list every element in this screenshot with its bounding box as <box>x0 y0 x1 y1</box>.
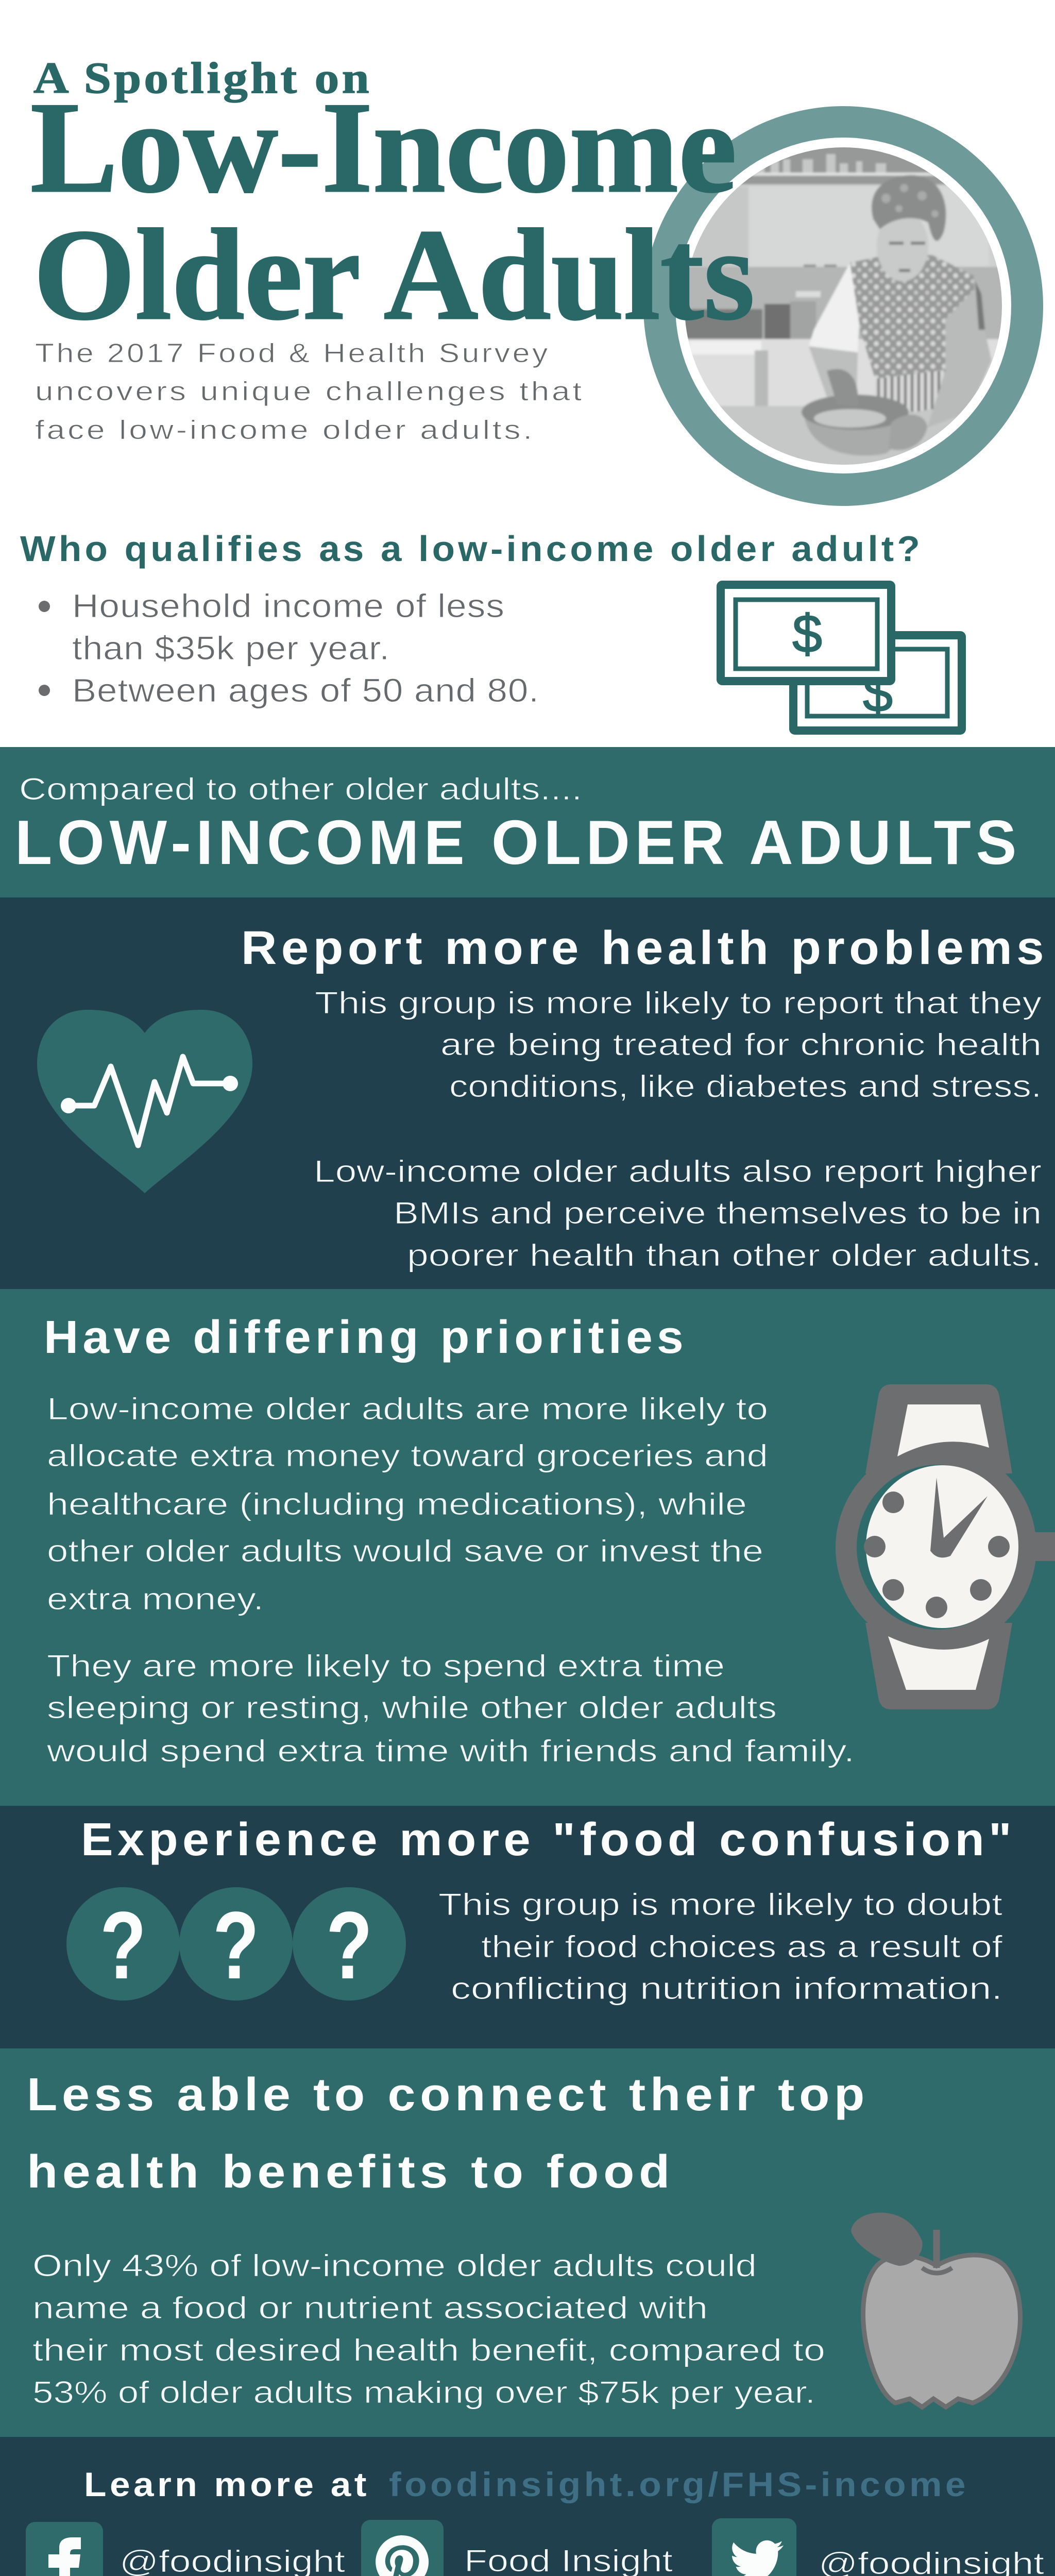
icon: three question marks: ? <box>100 1892 146 1999</box>
body text: Low-income older adults also report higher <box>314 1154 1042 1189</box>
body text: other older adults would save or invest the <box>47 1534 763 1568</box>
mixing bowl <box>805 418 891 456</box>
body text: are being treated for chronic health <box>440 1027 1042 1062</box>
body text: allocate extra money toward groceries and <box>47 1438 768 1473</box>
icon: money bills <box>721 585 962 731</box>
woman's apron <box>850 255 975 381</box>
icon: money bills: $ <box>792 604 822 664</box>
woman's sleeve and arm <box>809 263 861 352</box>
body text: Low-income older adults are more likely to <box>47 1392 768 1426</box>
body text: This group is more likely to doubt <box>438 1887 1002 1922</box>
heading: who qualifies: Who qualifies as a low-income older adult? <box>20 529 923 569</box>
heading: Experience more "food confusion" <box>81 1814 1016 1866</box>
body text: BMIs and perceive themselves to be in <box>394 1196 1042 1230</box>
body text: 53% of older adults making over $75k per year. <box>32 2375 815 2410</box>
panel: differing priorities <box>0 1289 1055 1806</box>
body text: their most desired health benefit, compared to <box>32 2333 825 2367</box>
heading: Have differing priorities <box>44 1312 688 1363</box>
icon: money bills: $ <box>863 664 893 723</box>
body text: healthcare (including medications), while <box>47 1487 747 1521</box>
intro text: The 2017 Food & Health Survey <box>35 338 550 368</box>
body text: sleeping or resting, while other older adults <box>47 1690 777 1725</box>
heading: Less able to connect their top <box>27 2069 869 2121</box>
qualification bullets <box>39 587 539 709</box>
body text: name a food or nutrient associated with <box>32 2291 708 2325</box>
icon: twitter <box>712 2518 796 2576</box>
title kicker: A Spotlight on <box>33 53 372 103</box>
panel: compared band <box>0 747 1055 897</box>
body text: Only 43% of low-income older adults could <box>32 2248 757 2283</box>
icon: heart with pulse <box>37 1010 252 1193</box>
photo: woman cooking in kitchen <box>680 144 1010 473</box>
panel: health problems <box>0 897 1055 1289</box>
qualification bullets: Household income of less <box>72 587 505 624</box>
intro text <box>35 338 584 445</box>
qualification bullets: than $35k per year. <box>72 630 390 667</box>
title line: Older Adults: Older Adults <box>33 202 755 347</box>
band heading: LOW-INCOME OLDER ADULTS <box>15 807 1022 877</box>
heading <box>27 2069 869 2198</box>
icon: wristwatch <box>836 1384 1055 1709</box>
body text: They are more likely to spend extra time <box>47 1649 725 1683</box>
panel: health benefits to food <box>0 2048 1055 2437</box>
title <box>30 53 755 347</box>
body text: poorer health than other older adults. <box>407 1238 1042 1273</box>
panel: food confusion <box>0 1806 1055 2048</box>
icon: three question marks: ? <box>326 1892 372 1999</box>
body text <box>46 1392 855 1768</box>
body text: would spend extra time with friends and family. <box>46 1734 855 1768</box>
woman's face and hair <box>877 218 928 282</box>
intro text: uncovers unique challenges that <box>35 377 584 406</box>
icon: facebook <box>26 2522 103 2576</box>
panel: footer <box>0 2437 1055 2576</box>
icon: three question marks: ? <box>213 1892 259 1999</box>
heading: health benefits to food <box>27 2146 674 2198</box>
body text: conflicting nutrition information. <box>451 1971 1002 2006</box>
heading: Report more health problems <box>241 922 1048 974</box>
body text: their food choices as a result of <box>481 1929 1002 1964</box>
title line: Low-Income: Low-Income <box>30 75 737 219</box>
body text: extra money. <box>47 1582 264 1616</box>
band intro: Compared to other older adults.... <box>19 772 582 806</box>
body text: conditions, like diabetes and stress. <box>449 1069 1042 1104</box>
icon: portrait ring with photo <box>643 106 1043 506</box>
body text <box>438 1887 1002 2006</box>
icon: apple <box>851 2213 1020 2407</box>
icon: pinterest <box>361 2520 444 2576</box>
icon: three question marks <box>66 1887 406 2001</box>
body text: This group is more likely to report that they <box>315 986 1042 1020</box>
body text <box>32 2248 825 2410</box>
qualification bullets: Between ages of 50 and 80. <box>72 672 539 709</box>
body text <box>314 986 1042 1273</box>
intro text: face low-income older adults. <box>35 415 535 445</box>
learn more: Learn more at <box>84 2465 370 2503</box>
link: foodinsight.org/FHS-income <box>389 2465 969 2503</box>
